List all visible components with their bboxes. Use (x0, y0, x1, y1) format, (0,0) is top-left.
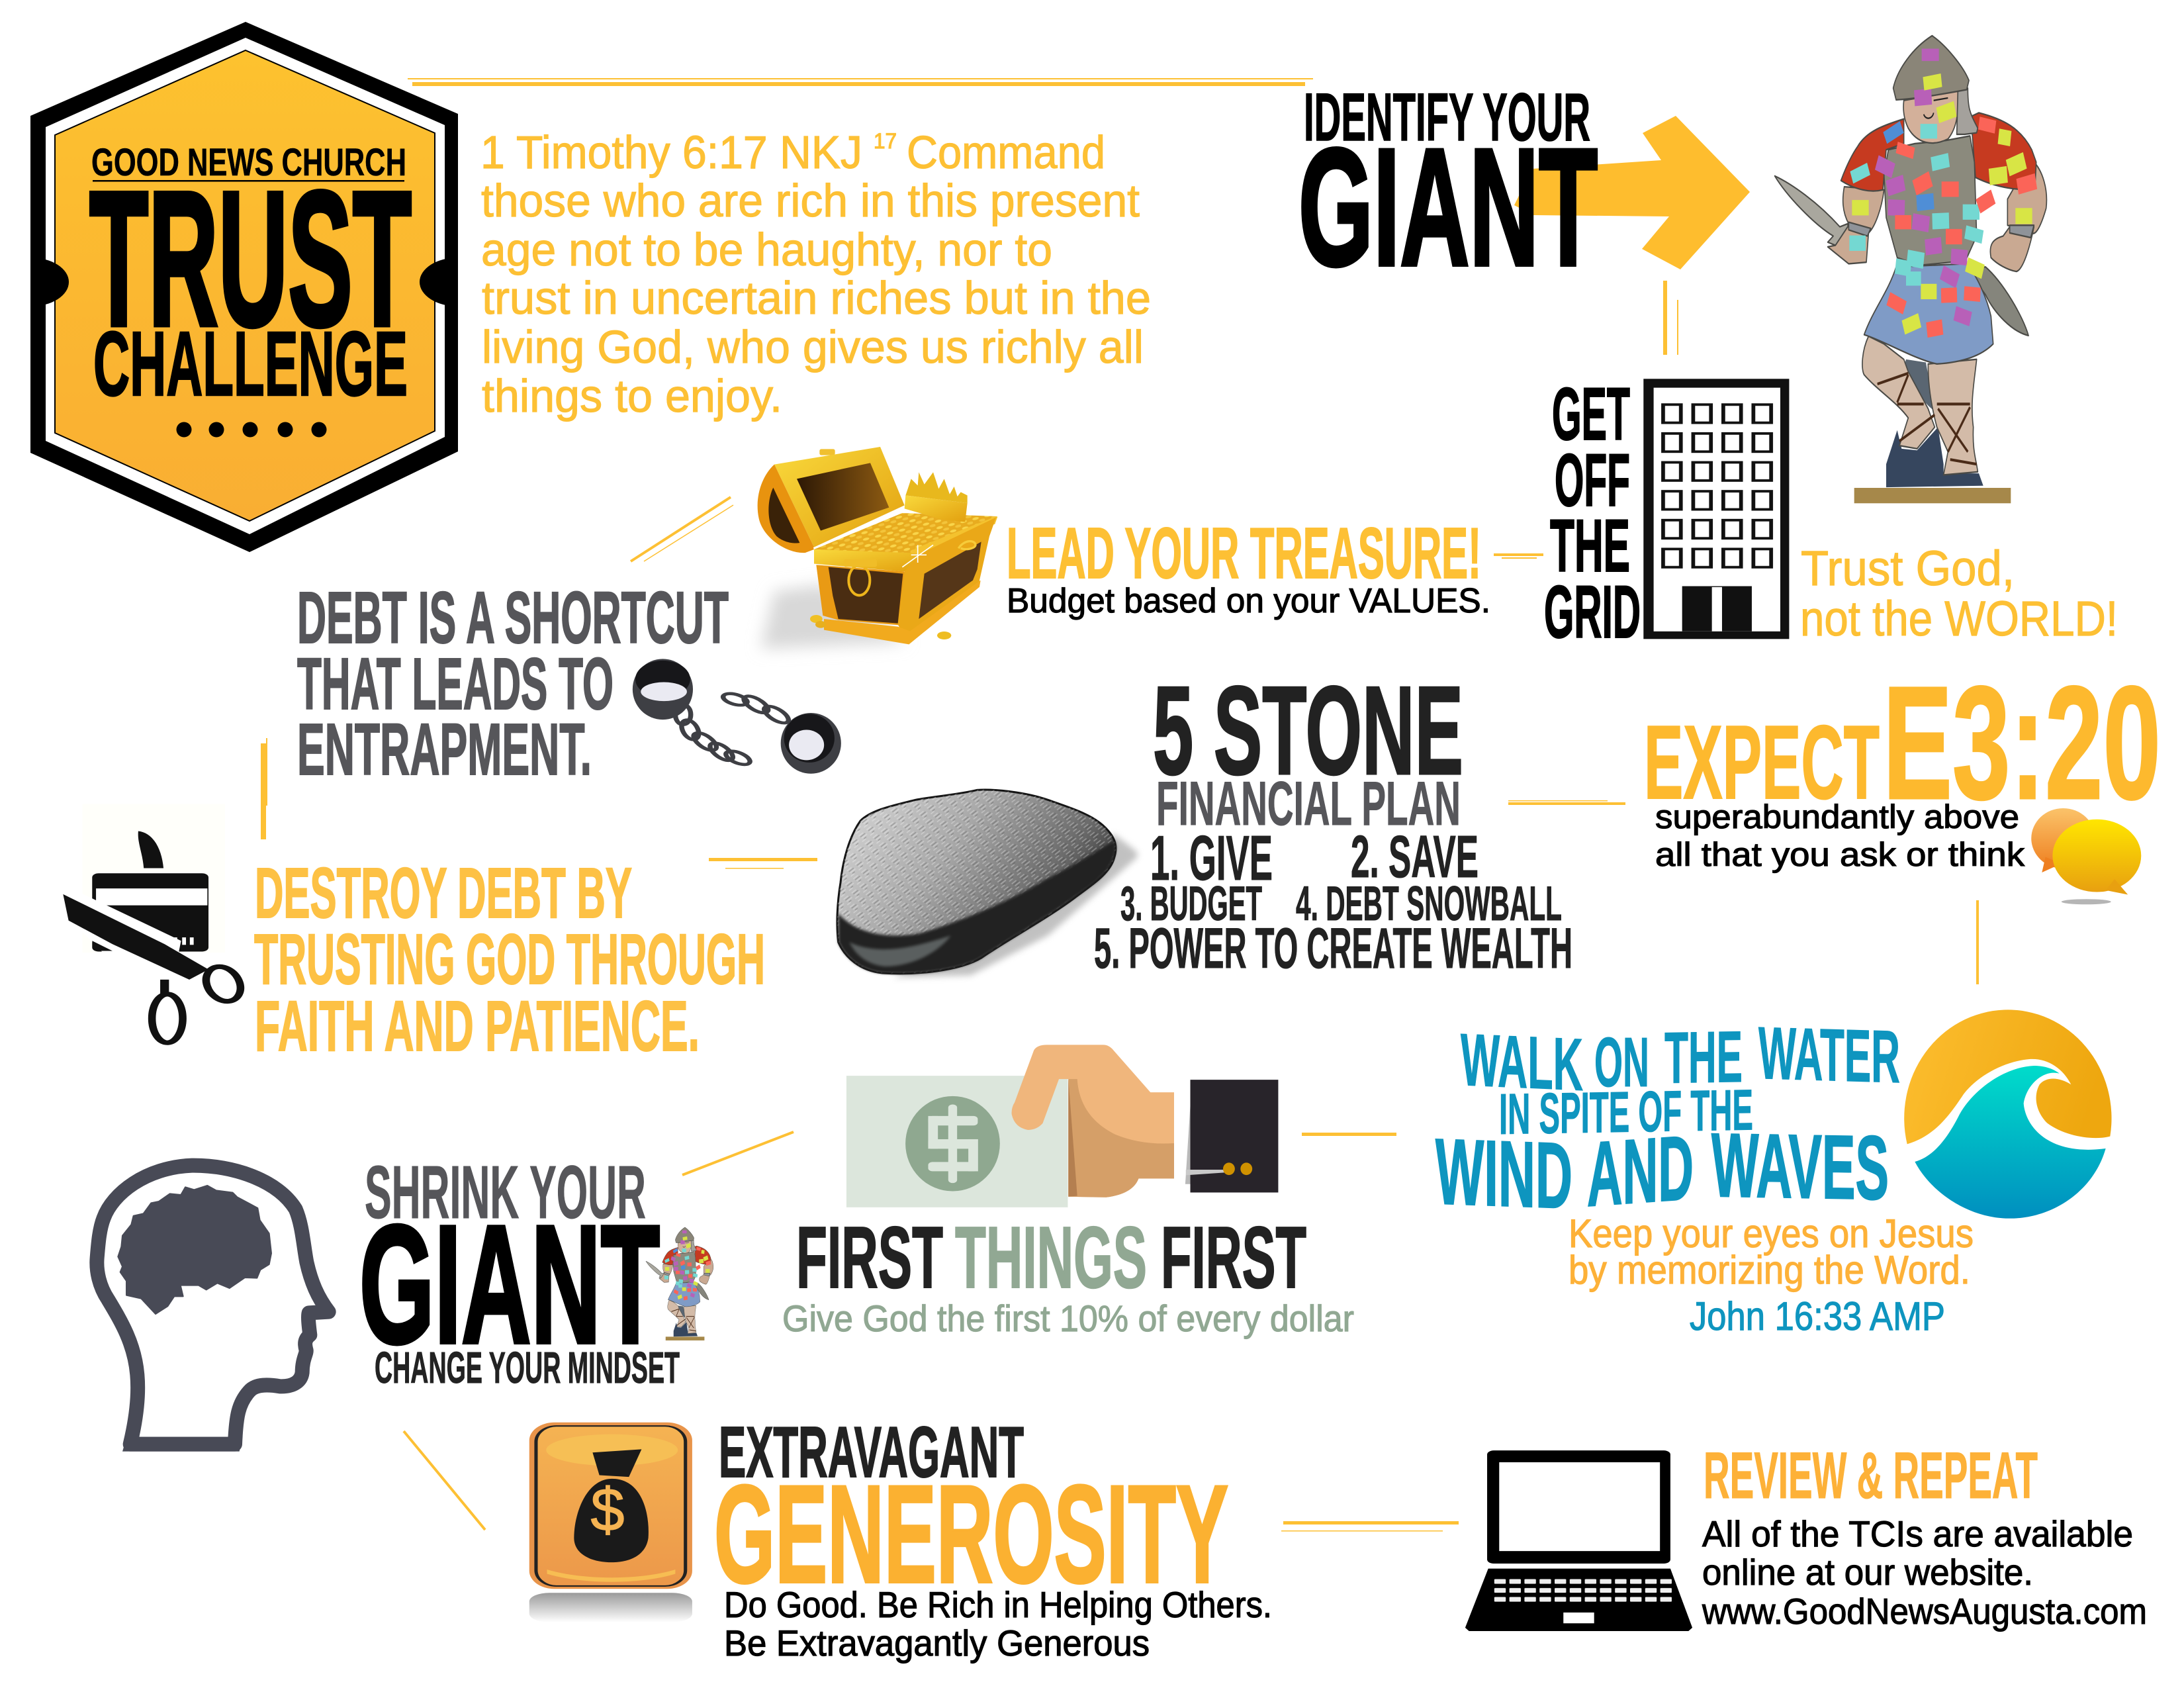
illustration: smooth stone (837, 790, 1138, 978)
text: Do Good (724, 1584, 1272, 1664)
heading: Identify your giant: IDENTIFY YOUR (1304, 79, 1590, 155)
illustration: small giant (646, 1227, 713, 1340)
heading: 5 Stone Financial Plan: 5 STONE (1153, 661, 1463, 801)
heading: First Things First: THINGS (955, 1209, 1147, 1306)
icon: broken shackles (633, 659, 841, 774)
text block: scripture verse: 17 (874, 129, 897, 153)
connector: dash beside treasure heading (1494, 553, 1543, 559)
connector: dash toward Expect (1508, 800, 1625, 805)
plan list: 1. GIVE (1150, 823, 1273, 894)
connector: dash toward stone (709, 858, 817, 868)
heading: Identify your giant (1298, 79, 1598, 301)
text: website note: online at our website. (1702, 1552, 2033, 1593)
text: Do Good: Do Good. Be Rich in Helping Others. (724, 1584, 1272, 1625)
heading: Get Off The Grid: OFF (1555, 439, 1630, 522)
text block: Debt is a shortcut: DEBT IS A SHORTCUT (297, 577, 729, 659)
text block: scripture verse: age not to be haughty, nor to (481, 224, 1052, 275)
text: Keep your eyes on Jesus: Keep your eyes on Jesus (1569, 1211, 1974, 1256)
icon: money bag app tile (529, 1423, 692, 1622)
text: Keep your eyes on Jesus: by memorizing the Word. (1569, 1248, 1970, 1292)
connector: top double line (408, 78, 1313, 86)
text: Trust God, not the World: Trust God, (1801, 541, 2015, 596)
logo dots (176, 422, 327, 437)
text: Do Good: Be Extravagantly Generous (724, 1622, 1150, 1664)
text block: scripture verse: things to enjoy. (482, 370, 782, 422)
heading: Get Off The Grid (1544, 373, 1641, 653)
text: website note (1702, 1513, 2147, 1632)
heading: Shrink your giant: GIANT (359, 1190, 660, 1378)
heading: First Things First: FIRST (796, 1209, 943, 1306)
text block: scripture verse: Command (907, 126, 1105, 178)
illustration: treasure chest with crown (758, 447, 997, 649)
icon: wave logo (1904, 1009, 2112, 1219)
heading: Shrink your giant: SHRINK YOUR (365, 1150, 646, 1234)
text: Trust God, not the World (1800, 541, 2118, 646)
connector: vertical line toward wave (1976, 900, 1979, 984)
arrow: toward the giant (1514, 116, 1750, 269)
text block: Debt is a shortcut (297, 577, 729, 790)
heading: Extravagant Generosity (714, 1412, 1272, 1664)
heading: Walk on the water, wavy text: ON (1594, 1023, 1649, 1102)
heading: Walk on the water, wavy text: WIND (1435, 1119, 1572, 1228)
illustration: giant covered in sticky notes (1775, 36, 2046, 503)
heading: First Things First: FIRST (1161, 1209, 1306, 1306)
heading: Extravagant Generosity: EXTRAVAGANT (719, 1412, 1024, 1493)
logo text: Challenge: CHALLENGE (93, 313, 408, 415)
text block: scripture verse: 1 Timothy 6:17 NKJ (480, 126, 862, 178)
heading: Lead Your Treasure: Budget based on your VALUES. (1007, 582, 1490, 620)
caption: Give God the first 10%: Give God the first 10% of every dollar (782, 1297, 1354, 1339)
text: superabundantly above: all that you ask or think (1655, 836, 2025, 873)
connector: diagonal line to generosity (404, 1431, 485, 1530)
icon: office building (1643, 379, 1789, 639)
plan list: 2. SAVE (1351, 824, 1479, 890)
text: superabundantly above: superabundantly above (1655, 798, 2019, 835)
logo text: Good News Church: GOOD NEWS CHURCH (91, 141, 406, 184)
text: superabundantly above (1655, 798, 2025, 873)
logo text: Trust: TRUST (89, 152, 412, 366)
heading: Shrink your giant (359, 1150, 680, 1393)
connector: diagonal line from hand to Shrink (682, 1132, 794, 1175)
plan list: 3. BUDGET (1120, 877, 1262, 931)
heading: Expect E3:20 (1644, 653, 2161, 833)
heading: Walk on the water, wavy text: IN SPITE OF THE (1499, 1078, 1753, 1147)
heading: Get Off The Grid: THE (1550, 504, 1630, 587)
heading: Walk on the water, wavy text (1435, 1011, 1900, 1228)
heading: Walk on the water, wavy text: WAVES (1711, 1115, 1889, 1219)
heading: Lead Your Treasure: LEAD YOUR TREASURE! (1007, 513, 1481, 594)
text block: scripture verse: those who are rich in this present (481, 175, 1140, 226)
connector: diagonal line from chest (631, 497, 733, 561)
heading: Get Off The Grid: GRID (1544, 571, 1641, 653)
connector: line to Get Off the Grid (1663, 281, 1678, 355)
text: website note: www.GoodNewsAugusta.com (1702, 1591, 2147, 1632)
heading: 5 Stone Financial Plan: FINANCIAL PLAN (1156, 769, 1461, 838)
text block: Destroy debt (254, 853, 765, 1066)
heading: 5 Stone Financial Plan (1094, 661, 1572, 980)
heading: Extravagant Generosity: GENEROSITY (714, 1456, 1228, 1612)
connector: dash to laptop (1281, 1521, 1459, 1532)
heading: Shrink your giant: CHANGE YOUR MINDSET (375, 1343, 680, 1393)
heading: Get Off The Grid: GET (1552, 373, 1630, 455)
text block: scripture verse: living God, who gives us richly all (482, 321, 1144, 373)
heading: Identify your giant: GIANT (1298, 115, 1598, 301)
dollar sign on bag: $ (590, 1476, 625, 1544)
text block: scripture verse: trust in uncertain riches but in the (482, 272, 1151, 324)
logo: Trust Challenge hexagon badge (0, 22, 499, 552)
text block: Debt is a shortcut: ENTRAPMENT. (297, 709, 592, 790)
heading: First Things First (782, 1209, 1354, 1339)
icon: head with brain (97, 1166, 329, 1452)
heading: Expect E3:20: EXPECT (1644, 704, 1880, 821)
text block: Debt is a shortcut: THAT LEADS TO (297, 643, 614, 725)
text block: Destroy debt: FAITH AND PATIENCE. (255, 986, 700, 1066)
heading: Walk on the water, wavy text: THE (1664, 1016, 1743, 1099)
plan list: 4. DEBT SNOWBALL (1296, 877, 1562, 931)
text: John 16:33 AMP: John 16:33 AMP (1690, 1294, 1945, 1338)
heading: Walk on the water, wavy text: AND (1587, 1117, 1694, 1226)
plan list (1094, 823, 1572, 980)
text: website note: All of the TCIs are available (1702, 1513, 2133, 1554)
plan list: 5. POWER TO CREATE WEALTH (1094, 917, 1572, 980)
text block: Destroy debt: DESTROY DEBT BY (255, 853, 632, 933)
icon: laptop (1465, 1450, 1692, 1631)
heading: Walk on the water, wavy text: WALK (1461, 1018, 1583, 1106)
heading: Walk on the water, wavy text: WATER (1758, 1011, 1900, 1098)
icon: dollar bill held by hand (846, 1045, 1278, 1207)
icon: speech bubbles (2031, 808, 2141, 904)
connector: vertical line between debt blocks (261, 738, 267, 839)
text block: scripture verse (480, 126, 1151, 422)
heading: Lead Your Treasure (1007, 513, 1490, 620)
text: Trust God, not the World: not the WORLD! (1800, 591, 2118, 646)
text: Keep your eyes on Jesus (1569, 1211, 1974, 1292)
connector: dash between hand and wave (1302, 1133, 1396, 1136)
text block: Destroy debt: TRUSTING GOD THROUGH (254, 919, 765, 999)
icon: scissors cutting credit card (60, 804, 246, 1043)
